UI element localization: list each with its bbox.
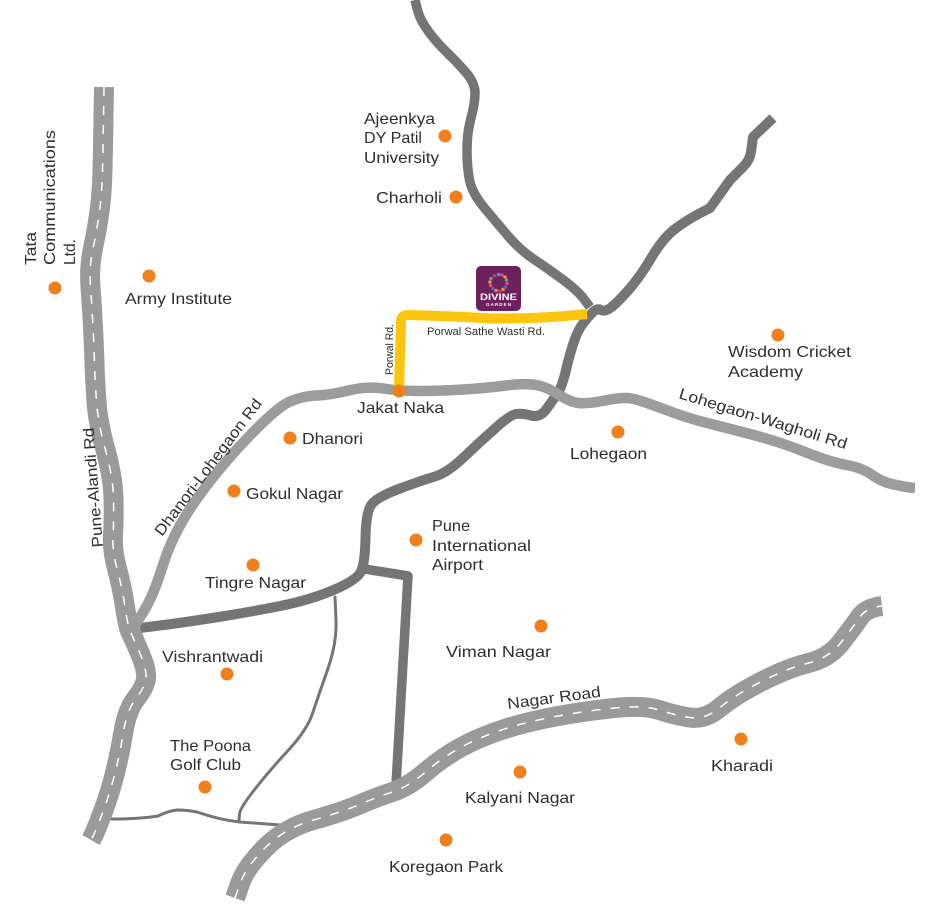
pin: Wisdom Cricket Academy: Wisdom Cricket [728, 344, 852, 361]
pin: Tata Communications Ltd.: Tata [23, 232, 40, 265]
pin: Charholi [376, 190, 462, 207]
pin: Charholi: Charholi [376, 190, 442, 207]
pin: The Poona Golf Club: Golf Club [170, 757, 241, 774]
highway: Pune-Alandi Rd [90, 87, 146, 840]
pin: Wisdom Cricket Academy: Academy [728, 364, 803, 381]
pin: Army Institute [125, 270, 232, 308]
label: Lohegaon-Wagholi Rd: Lohegaon-Wagholi Rd [677, 386, 849, 453]
pin: Ajeenkya DY Patil University: Ajeenkya [364, 111, 435, 128]
pin: Lohegaon [570, 426, 647, 463]
pin: Viman Nagar: Viman Nagar [446, 644, 552, 661]
pin: Tingre Nagar [205, 558, 307, 592]
pin: Gokul Nagar: Gokul Nagar [246, 486, 344, 503]
pin: Army Institute: Army Institute [125, 291, 232, 308]
pin: Vishrantwadi: Vishrantwadi [162, 649, 263, 666]
pin: Kharadi [711, 732, 773, 775]
highlighted route: Porwal roads [399, 314, 587, 390]
pin: Pune International Airport: Pune [432, 518, 470, 535]
pin: The Poona Golf Club [170, 738, 251, 794]
pin: Ajeenkya DY Patil University [364, 111, 452, 167]
pin: Kalyani Nagar: Kalyani Nagar [465, 790, 576, 807]
label: Pune-Alandi Rd: Pune-Alandi Rd [81, 427, 107, 548]
pin: Tata Communications Ltd.: Ltd. [62, 239, 79, 265]
logo: Divine Garden [476, 266, 521, 311]
pin: Viman Nagar [446, 620, 552, 661]
label: Porwal Rd.: Porwal Rd. [384, 324, 396, 375]
pin: Kalyani Nagar [465, 766, 576, 807]
pin: Koregaon Park: Koregaon Park [389, 859, 504, 876]
logo: Divine Garden: GARDEN [486, 302, 511, 307]
pin: Tingre Nagar: Tingre Nagar [205, 575, 307, 592]
road: thin link [239, 597, 336, 820]
road: thin southern link [112, 810, 280, 825]
road: north-east dark road [140, 118, 773, 628]
road: airport connector [365, 569, 408, 785]
pin: Koregaon Park [389, 834, 504, 876]
pin: Vishrantwadi [162, 649, 263, 680]
pin: Lohegaon: Lohegaon [570, 446, 647, 463]
pin: Wisdom Cricket Academy [728, 328, 852, 381]
road: north dark road [415, 0, 590, 307]
pin: Tata Communications Ltd.: Communications [42, 130, 59, 265]
road: Dhanori-Lohegaon and Lohegaon-Wagholi Rd [133, 384, 915, 628]
label: Dhanori-Lohegaon Rd: Dhanori-Lohegaon Rd [152, 396, 266, 539]
label: Porwal Sathe Wasti Rd.: Porwal Sathe Wasti Rd. [427, 326, 545, 338]
pin: Pune International Airport: Airport [432, 557, 484, 574]
pin: Ajeenkya DY Patil University: DY Patil [364, 130, 422, 147]
pin: Pune International Airport [410, 518, 531, 574]
pin: Jakat Naka [357, 384, 444, 417]
pin: Dhanori: Dhanori [302, 431, 363, 448]
logo: Divine Garden: DIVINE [480, 292, 517, 302]
pin: Jakat Naka: Jakat Naka [357, 400, 444, 417]
highway: Nagar Road [235, 606, 882, 898]
pin: Ajeenkya DY Patil University: University [364, 150, 439, 167]
pin: The Poona Golf Club: The Poona [170, 738, 251, 755]
pin: Pune International Airport: International [432, 538, 531, 555]
pin: Tata Communications Ltd. [23, 130, 79, 294]
pin: Kharadi: Kharadi [711, 758, 773, 775]
label: Nagar Road: Nagar Road [506, 684, 602, 713]
